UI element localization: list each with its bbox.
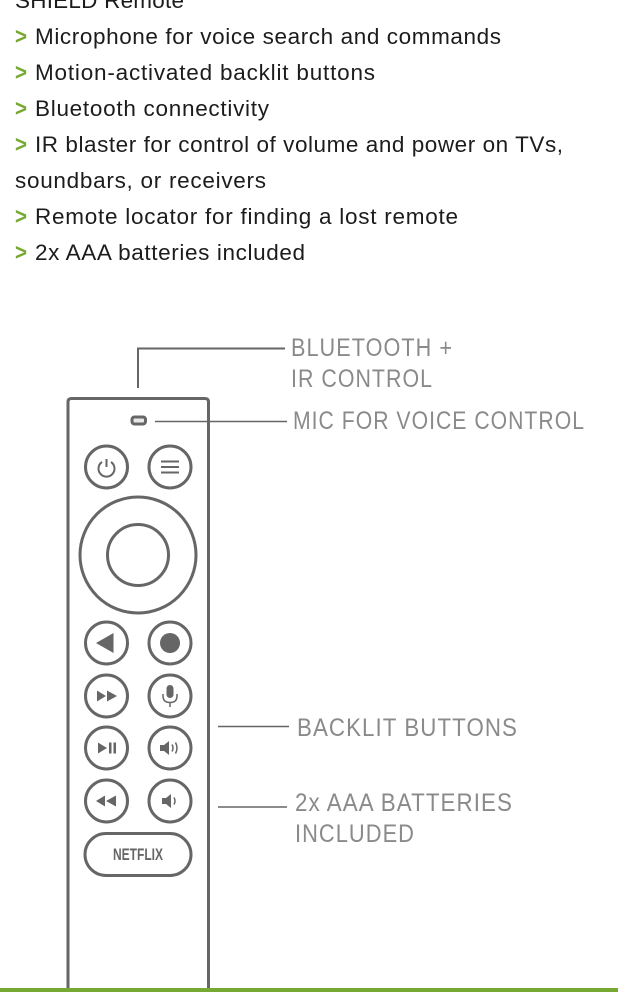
button: voice microphone xyxy=(149,675,191,717)
bullet: IR blaster xyxy=(15,131,563,193)
bullet: batteries: 2x AAA batteries included xyxy=(35,240,305,265)
bullet: bluetooth: Bluetooth connectivity xyxy=(35,96,270,121)
bullet: backlit buttons: Motion-activated backlit buttons xyxy=(35,60,375,85)
callout: AAA batteries included: 2x AAA BATTERIES xyxy=(295,789,513,817)
green footer bar xyxy=(0,988,618,992)
callout: bluetooth and IR control xyxy=(138,334,453,393)
remote control diagram xyxy=(68,398,208,990)
button: menu xyxy=(149,446,191,488)
feature list xyxy=(15,0,563,265)
bullet: bluetooth: > xyxy=(15,95,27,121)
button: Netflix xyxy=(85,834,191,876)
bullet: microphone: > xyxy=(15,23,27,49)
remote body xyxy=(68,398,208,990)
callout: AAA batteries included: INCLUDED xyxy=(295,820,415,848)
button: volume down xyxy=(149,780,191,822)
bullet: IR blaster: IR blaster for control of volume and power on TVs, xyxy=(35,132,563,157)
button: power xyxy=(86,446,128,488)
icon: microphone indicator xyxy=(132,417,146,424)
button: rewind xyxy=(86,780,128,822)
bullet: IR blaster: > xyxy=(15,131,27,157)
button: volume up xyxy=(149,727,191,769)
button: back xyxy=(86,622,128,664)
bullet: remote locator: > xyxy=(15,203,27,229)
button: Netflix: NETFLIX xyxy=(113,845,163,864)
bullet: batteries: > xyxy=(15,239,27,265)
bullet: IR blaster: soundbars, or receivers xyxy=(15,168,266,193)
button: home xyxy=(149,622,191,664)
button: navigation ring xyxy=(80,497,196,613)
callout: bluetooth and IR control: IR CONTROL xyxy=(291,365,433,393)
button: fast forward xyxy=(86,675,128,717)
bullet: backlit buttons: > xyxy=(15,59,27,85)
callout: AAA batteries included xyxy=(218,789,513,848)
callout: backlit buttons: BACKLIT BUTTONS xyxy=(297,714,518,742)
bullet: microphone: Microphone for voice search and commands xyxy=(35,24,501,49)
bullet: remote locator: Remote locator for finding a lost remote xyxy=(35,204,458,229)
callout: bluetooth and IR control: BLUETOOTH + xyxy=(291,334,453,362)
button: play pause xyxy=(86,727,128,769)
